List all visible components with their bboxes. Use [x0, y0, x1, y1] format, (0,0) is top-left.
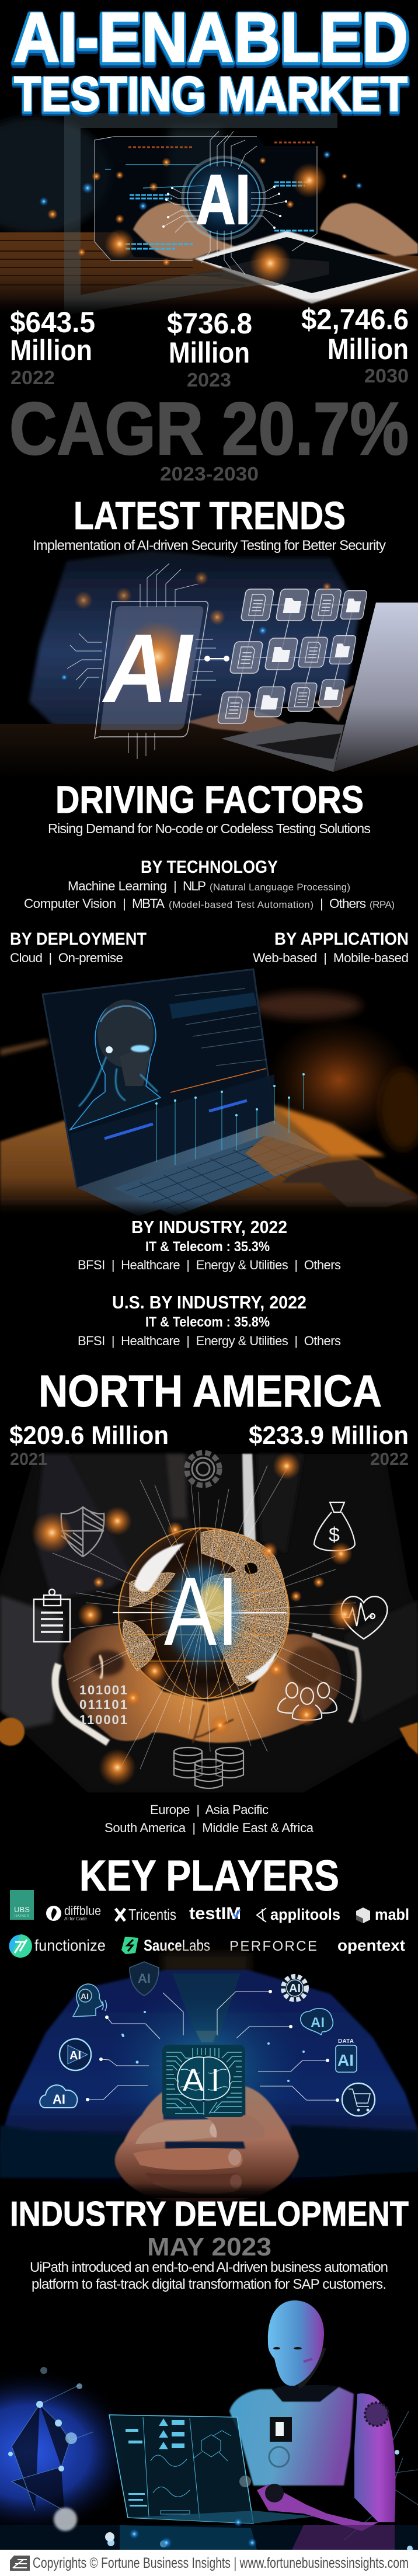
icon: AI shield: AI [138, 1971, 151, 1986]
icon: AI cart [342, 2083, 375, 2116]
segment: by application: Web-based | Mobile-based [253, 951, 409, 965]
other regions list: Europe | Asia Pacific [150, 1802, 269, 1817]
segment: U.S. by industry 2022: BFSI | Healthcare | Energy & Utilities | Others [78, 1334, 341, 1348]
segment: by industry 2022: IT & Telecom : 35.3% [145, 1239, 270, 1255]
segment: by technology: (RPA) [370, 899, 395, 910]
robot body [229, 2300, 396, 2531]
heading: driving factors [48, 778, 371, 836]
icon: AI data cylinder [336, 2038, 357, 2072]
icon: AI head: AI [81, 1992, 89, 2001]
segment: U.S. by industry 2022 [78, 1292, 341, 1348]
segment: by technology: MBTA [132, 896, 165, 911]
icon: money bag [314, 1502, 355, 1551]
icon: AI gear: AI [289, 1982, 301, 1995]
segment: by application [253, 930, 409, 965]
segment: by application: BY APPLICATION [274, 930, 409, 949]
icon: binary: 011101 [79, 1697, 127, 1712]
logos: key players [9, 1890, 409, 1958]
stat: 2030 market size: 2030 [364, 365, 409, 387]
icon: AI brain [301, 2008, 333, 2035]
logo: diffblue: AI for Code [64, 1916, 88, 1921]
heading: driving factors: Rising Demand for No-code or Codeless Testing Solutions [48, 821, 371, 836]
icon: clipboard [34, 1589, 70, 1642]
icon: AI data cylinder: AI [337, 2051, 354, 2069]
icon: AI head [73, 1984, 106, 2017]
stat: 2023 market size: 2023 [187, 369, 231, 391]
clasped hands [115, 2086, 299, 2202]
CAGR callout: 2023-2030 [160, 463, 259, 485]
stat: 2022 market size: $643.5 [10, 306, 95, 339]
segment: by technology: BY TECHNOLOGY [141, 857, 278, 877]
icon: AI play circle [60, 2039, 91, 2070]
logo: functionize [9, 1934, 106, 1958]
stat: 2023 market size: Million [169, 336, 250, 369]
segment: by technology: | [123, 896, 126, 911]
stat: 2022 market size [10, 306, 95, 388]
footer [0, 2550, 418, 2576]
icon: gear [187, 1453, 220, 1485]
logo: functionize: functionize [34, 1937, 106, 1954]
heading: north america: NORTH AMERICA [39, 1366, 382, 1416]
other regions list: South America | Middle East & Africa [104, 1820, 314, 1835]
logo: mabl [356, 1906, 409, 1923]
segment: by technology: (Model-based Test Automation) [169, 899, 314, 910]
cupped hands [55, 1625, 359, 1743]
photo: hands with AI hologram and tablet [0, 113, 418, 316]
segment: U.S. by industry 2022: U.S. BY INDUSTRY, 2022 [112, 1292, 306, 1313]
development description: platform to fast-track digital transformation for SAP customers. [32, 2276, 386, 2292]
photo: robot using transparent laptop [0, 2300, 418, 2551]
stat: 2023 market size [167, 307, 252, 391]
icon: people [278, 1683, 337, 1720]
segment: by technology: Machine Learning [68, 879, 167, 893]
segment: by technology: (Natural Language Processing) [210, 882, 350, 893]
icon: AI cloud [40, 2085, 78, 2108]
segment: by technology: Others [329, 896, 366, 911]
development description [30, 2260, 388, 2292]
icon: AI data cylinder: DATA [338, 2038, 354, 2045]
stat: North America 2021: 2021 [10, 1450, 47, 1469]
photo: laptop with AI robot on screen [0, 969, 418, 1217]
connector lines [88, 1992, 337, 2100]
icon: AI brain: AI [311, 2015, 325, 2031]
photo: person holding phone with AI icons [0, 1953, 418, 2202]
logo: applitools: applitools [270, 1906, 340, 1923]
segment: by industry 2022 [78, 1217, 341, 1272]
segment: by technology [24, 857, 395, 911]
icon: AI gear [283, 1976, 306, 2000]
segment: by deployment: BY DEPLOYMENT [10, 930, 147, 949]
heading: latest trends [33, 494, 386, 554]
photo: man at laptop with AI chip and documents [0, 551, 418, 779]
stat: 2023 market size: $736.8 [167, 307, 252, 340]
logo: UBS Hainer: HAINER [15, 1914, 29, 1918]
footer logo [10, 2556, 30, 2571]
segment: by technology: Computer Vision [24, 896, 116, 911]
icon: money bag: $ [329, 1524, 340, 1546]
logo: OpenText: opentext [337, 1937, 405, 1954]
other regions list [104, 1802, 314, 1835]
icon: shield [61, 1507, 104, 1557]
logo: mabl: mabl [375, 1906, 409, 1923]
logo: diffblue [46, 1903, 101, 1921]
photo: man at laptop with AI chip and documents: AI [102, 614, 194, 723]
stat: 2022 market size: Million [10, 334, 92, 367]
photo: hands holding AI globe with icons: AI [164, 1558, 239, 1666]
date: May 2023: MAY 2023 [147, 2233, 271, 2261]
phone with circuit brain: A I [183, 2063, 220, 2098]
segment: by industry 2022: BY INDUSTRY, 2022 [131, 1217, 287, 1237]
phone with circuit brain [162, 2045, 245, 2117]
logo: UBS Hainer [10, 1890, 34, 1920]
segment: by deployment: Cloud | On-premise [10, 951, 123, 965]
heading: latest trends: LATEST TRENDS [74, 494, 346, 538]
icon: heart [342, 1596, 387, 1639]
stat: North America 2021 [9, 1421, 169, 1469]
photo: hands with AI hologram and tablet: AI [196, 161, 250, 239]
segment: by technology: NLP [183, 879, 206, 893]
icon: binary: 101001 [79, 1683, 127, 1697]
heading: latest trends: Implementation of AI-driven Security Testing for Better Security [33, 538, 386, 554]
logo: UBS Hainer: UBS [14, 1905, 30, 1914]
photo: hands holding AI globe with icons [0, 1452, 418, 1792]
stat: 2030 market size [301, 303, 409, 387]
globe [113, 1528, 289, 1698]
title [12, 0, 409, 124]
logo: testim: testIM [189, 1904, 241, 1923]
heading: driving factors: DRIVING FACTORS [55, 778, 364, 821]
icon: AI shield [130, 1962, 159, 1996]
icon: database [174, 1747, 243, 1788]
segment: by industry 2022: BFSI | Healthcare | Energy & Utilities | Others [78, 1258, 341, 1272]
stat: 2030 market size: $2,746.6 [301, 303, 409, 336]
stat: North America 2022: 2022 [370, 1450, 409, 1469]
transparent laptop [109, 2415, 315, 2550]
icon: AI cloud: AI [53, 2092, 65, 2107]
segment: U.S. by industry 2022: IT & Telecom : 35.8% [145, 1314, 270, 1330]
icon: AI play circle: AI [69, 2049, 81, 2062]
logo: Tricentis: Tricentis [128, 1906, 176, 1923]
stat: North America 2022: $233.9 Million [249, 1421, 409, 1450]
logo: Tricentis [116, 1906, 176, 1923]
logo: diffblue: diffblue [64, 1903, 101, 1918]
stat: 2022 market size: 2022 [11, 367, 55, 388]
segment: by deployment [10, 930, 147, 965]
heading: key players: KEY PLAYERS [79, 1851, 339, 1900]
logo: Perforce: PERFORCE [229, 1938, 317, 1954]
development description: UiPath introduced an end-to-end AI-driven business automation [30, 2260, 388, 2275]
segment: by technology: | [320, 896, 323, 911]
stat: North America 2021: $209.6 Million [9, 1421, 169, 1450]
icon: binary: 110001 [79, 1712, 127, 1727]
stat: 2030 market size: Million [328, 333, 409, 365]
icon: binary [79, 1683, 127, 1727]
logo: SauceLabs: SauceLabs [144, 1937, 210, 1954]
stat: North America 2022 [249, 1421, 409, 1469]
segment: by technology: | [173, 879, 177, 893]
